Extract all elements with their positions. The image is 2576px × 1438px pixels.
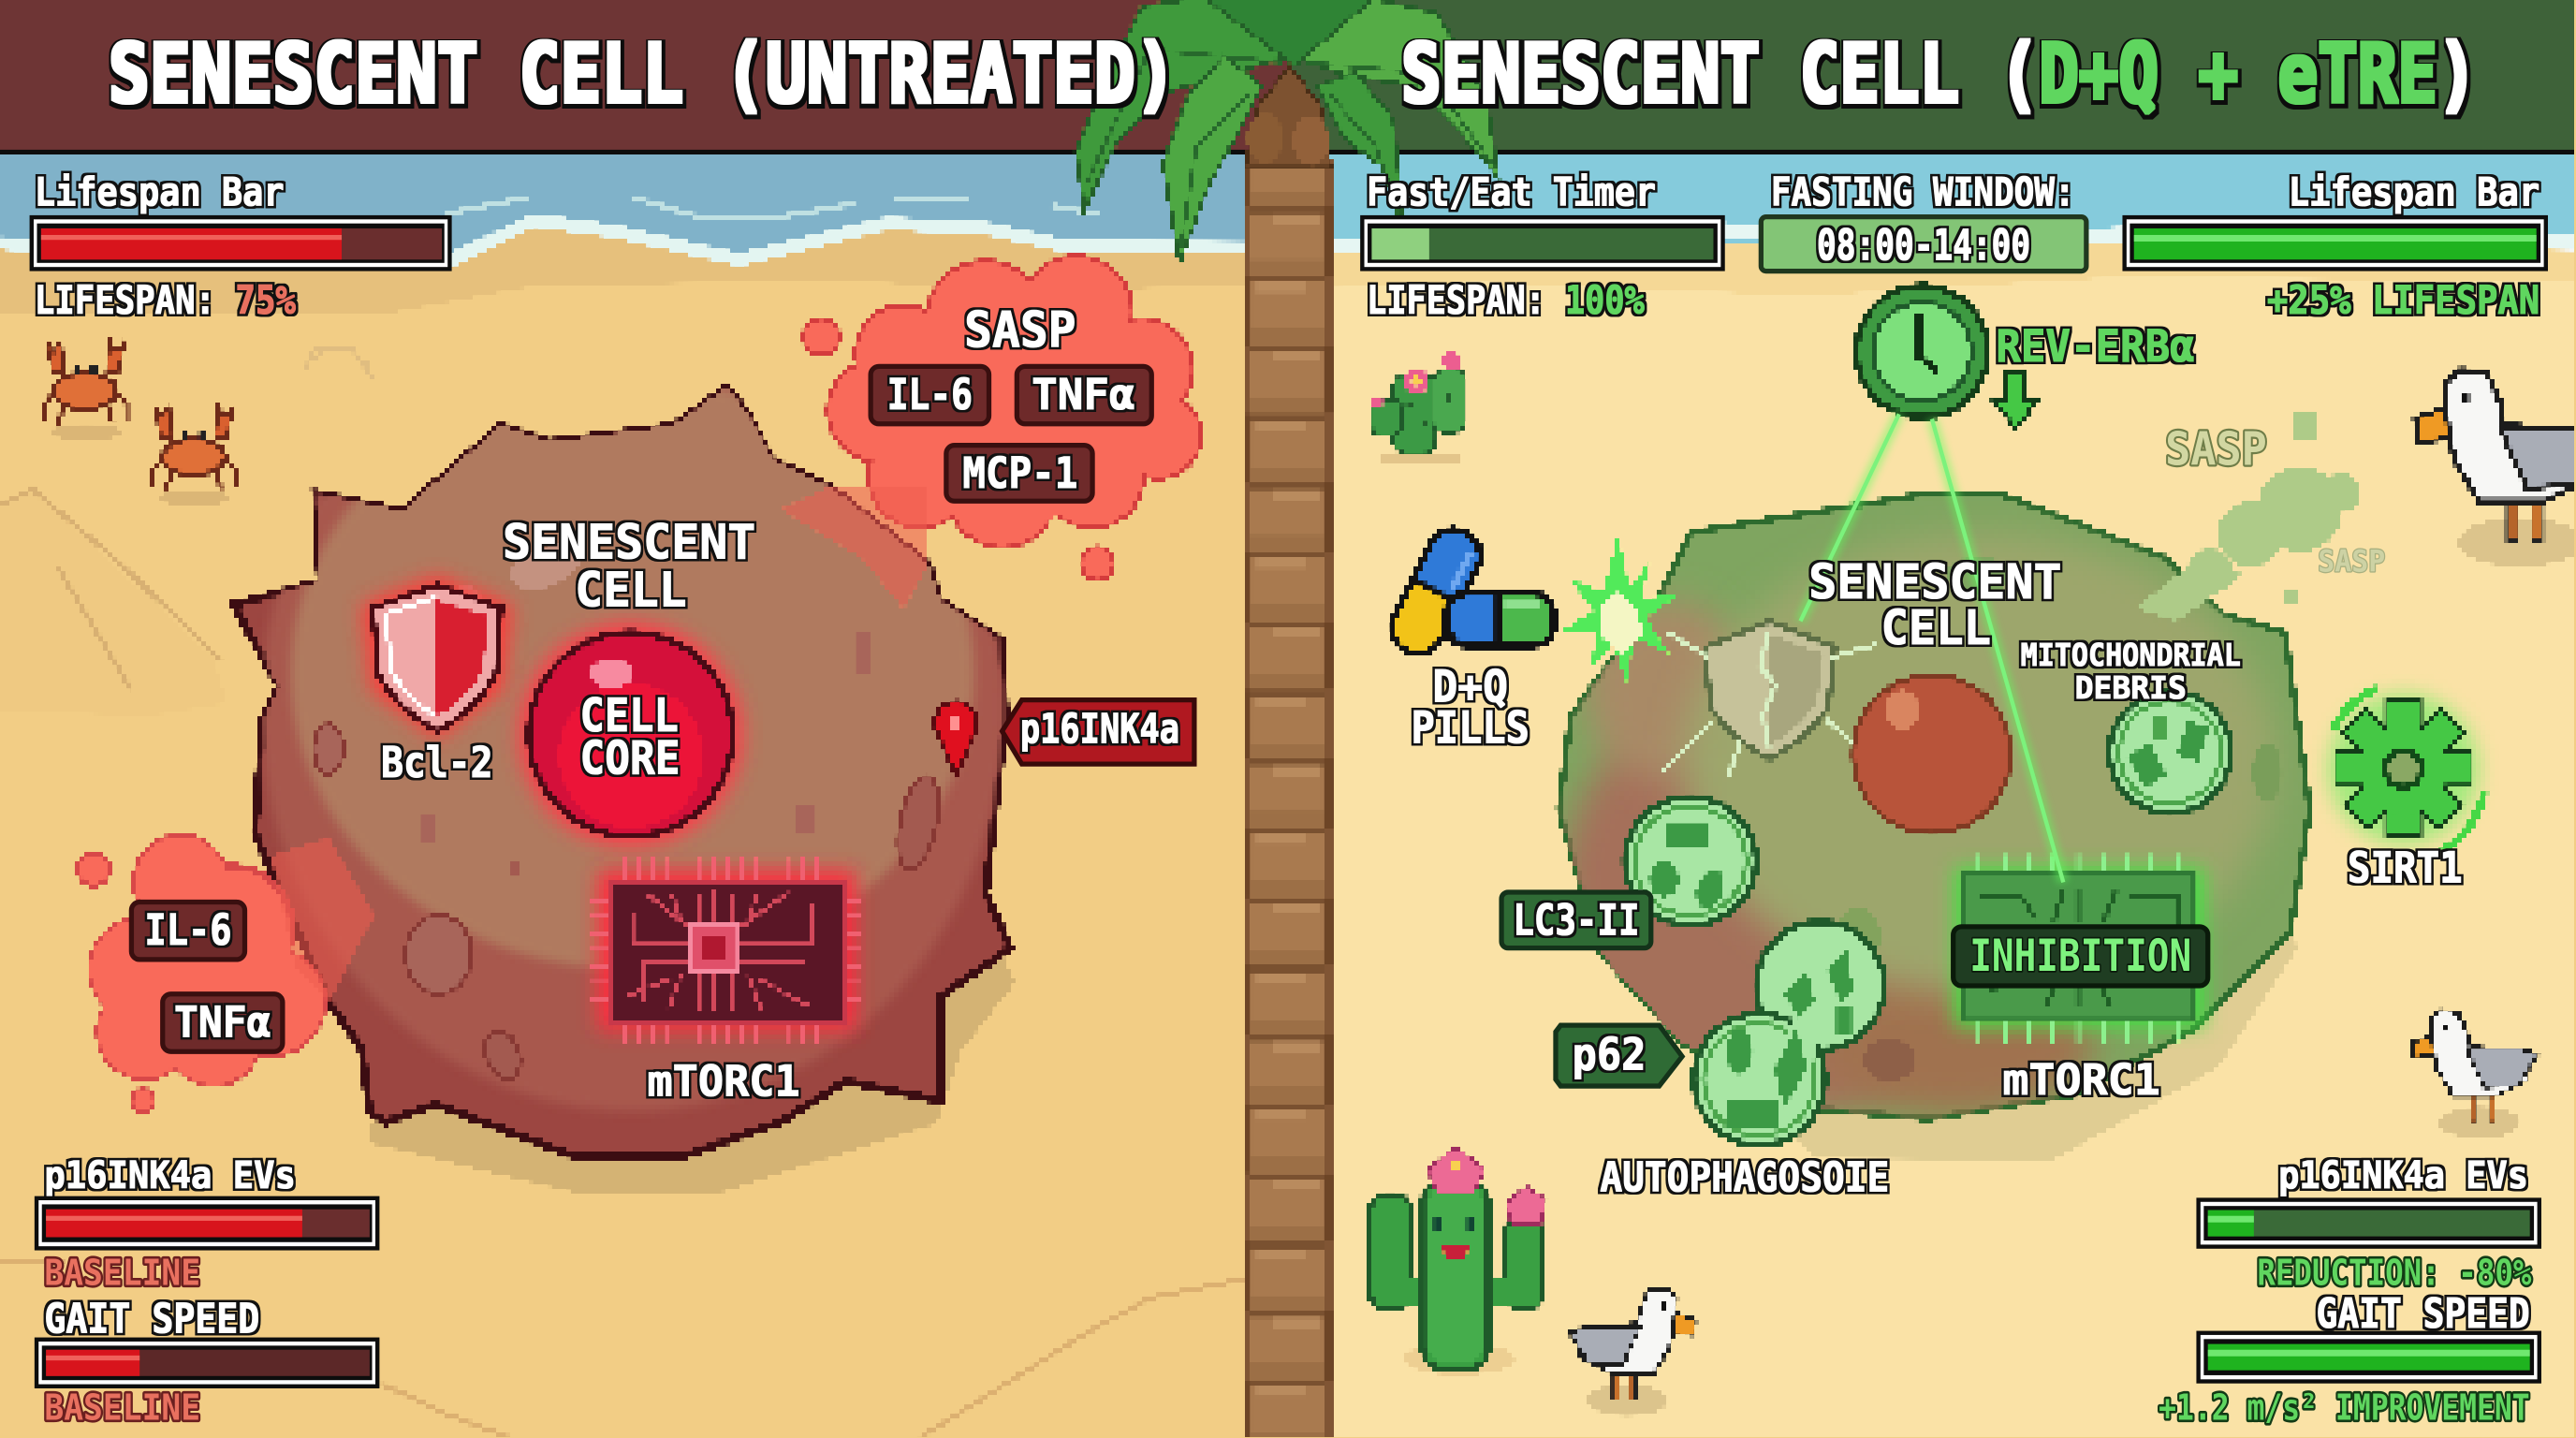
chip: TNFa: TNFα xyxy=(1032,370,1135,419)
label: p16INK4a callout: p16INK4a xyxy=(1020,705,1179,753)
treated cell body xyxy=(1559,494,2310,1160)
fasting window: FASTING WINDOW: xyxy=(1771,169,2075,214)
label: senescent cell, treated: CELL xyxy=(1881,601,1991,656)
label: mitochondrial debris: DEBRIS xyxy=(2075,669,2187,706)
chip: p62 with pointer xyxy=(1556,1025,1682,1086)
right lifespan bar block: +25% LIFESPAN xyxy=(2267,277,2539,323)
title: untreated: SENESCENT CELL (UNTREATED) xyxy=(109,26,1177,122)
label: mTORC1 treated: mTORC1 xyxy=(2002,1055,2160,1105)
left gait speed gauge: GAIT SPEED xyxy=(44,1295,259,1343)
icon: starburst xyxy=(1560,534,1679,682)
left p16INK4a EVs gauge: p16INK4a EVs xyxy=(44,1153,296,1197)
right gait speed gauge xyxy=(2159,1290,2541,1429)
chip: LC3-II: LC3-II xyxy=(1513,896,1639,946)
chip: INHIBITION: INHIBITION xyxy=(1969,931,2191,982)
icon: fusing autophagosomes xyxy=(1693,922,1884,1145)
label: senescent cell, untreated xyxy=(503,516,755,619)
chip: TNFa lower: TNFα xyxy=(174,997,271,1047)
untreated senescent cell body xyxy=(233,309,1016,1193)
left lifespan bar block xyxy=(30,169,452,323)
label: Bcl-2: Bcl-2 xyxy=(381,738,492,787)
header band: untreated xyxy=(0,0,1290,150)
fasting window: 08:00-14:00 xyxy=(1817,220,2030,270)
left gait speed gauge xyxy=(35,1295,379,1429)
icon: crab 2 xyxy=(153,405,235,506)
left p16INK4a EVs gauge xyxy=(35,1153,379,1294)
fasting window xyxy=(1761,169,2086,271)
label: cell core: CELL xyxy=(580,688,679,742)
icon: down arrow xyxy=(1993,373,2039,429)
left p16INK4a EVs gauge: BASELINE xyxy=(44,1252,200,1294)
icon: small cactus xyxy=(1370,352,1465,462)
left lifespan bar block: LIFESPAN: 75% xyxy=(35,277,296,323)
icon: big smiling cactus xyxy=(1370,1147,1545,1375)
SASP cloud xyxy=(781,258,1199,609)
background: left beach xyxy=(0,148,1297,1438)
icon: seagull, middle right xyxy=(2411,1010,2538,1138)
right p16INK4a EVs gauge: p16INK4a EVs xyxy=(2278,1153,2528,1197)
title: treated: SENESCENT CELL (D+Q + eTRE) xyxy=(1401,26,2478,122)
fast/eat timer bar: LIFESPAN: 100% xyxy=(1367,277,1645,323)
label: SIRT1: SIRT1 xyxy=(2348,843,2463,892)
label: p16INK4a callout xyxy=(1003,700,1194,764)
header band: treated xyxy=(1290,0,2576,150)
SASP label: SASP xyxy=(964,301,1076,359)
inhibition light beams from clock xyxy=(1800,414,2063,882)
palm crown xyxy=(1076,0,1499,263)
chip: MCP-1: MCP-1 xyxy=(962,448,1077,498)
label: D+Q pills xyxy=(1412,661,1530,754)
label: mTORC1 untreated: mTORC1 xyxy=(647,1057,800,1107)
label: senescent cell, untreated: CELL xyxy=(575,564,687,619)
right gait speed gauge: GAIT SPEED xyxy=(2317,1290,2530,1338)
chip: IL-6 lower: IL-6 xyxy=(144,905,231,955)
icon: seagull, bottom centre xyxy=(1570,1288,1695,1416)
label: mitochondrial debris xyxy=(2021,637,2241,706)
icon: D+Q pills xyxy=(1383,521,1554,662)
label: cell core xyxy=(580,688,681,785)
icon: cracked Bcl-2 shield xyxy=(1662,621,1878,775)
fast/eat timer bar: Fast/Eat Timer xyxy=(1367,169,1656,214)
label: mitochondrial debris: MITOCHONDRIAL xyxy=(2021,637,2241,673)
palm trunk xyxy=(1244,157,1332,1438)
icon: cell core xyxy=(520,623,742,846)
lower-left cytokine cloud xyxy=(77,836,374,1112)
right p16INK4a EVs gauge: REDUCTION: -80% xyxy=(2257,1252,2531,1294)
fast/eat timer bar xyxy=(1360,169,1725,323)
icon: crab 1 xyxy=(44,340,126,440)
icon: mTORC1 chip, active xyxy=(592,858,862,1045)
faint small SASP label: SASP xyxy=(2318,546,2385,580)
right lifespan bar block: Lifespan Bar xyxy=(2289,169,2539,214)
icon: LC3-II autophagosome xyxy=(1625,797,1756,925)
chip: p62 with pointer: p62 xyxy=(1573,1030,1647,1081)
label: REV-ERB alpha: REV-ERBα xyxy=(1996,321,2195,373)
faint released SASP xyxy=(2136,411,2361,621)
right p16INK4a EVs gauge xyxy=(2196,1153,2541,1294)
icon: mTORC1 chip, inhibited xyxy=(1954,855,2204,1045)
right lifespan bar block xyxy=(2122,169,2548,323)
background: right beach xyxy=(1297,148,2576,1438)
icon: Bcl-2 shield xyxy=(361,575,513,740)
icon: p16INK4a pin xyxy=(935,701,977,775)
label: senescent cell, treated xyxy=(1808,555,2062,656)
left gait speed gauge: BASELINE xyxy=(44,1387,200,1429)
icon: mitochondrial debris vesicle xyxy=(2109,692,2231,814)
left lifespan bar block: Lifespan Bar xyxy=(35,169,285,214)
label: autophagosome: AUTOPHAGOSOIE xyxy=(1600,1153,1889,1201)
label: senescent cell, untreated: SENESCENT xyxy=(503,516,755,571)
label: cell core: CORE xyxy=(580,731,681,785)
label: D+Q pills: PILLS xyxy=(1412,702,1530,754)
chip: TNFa xyxy=(1017,366,1151,424)
icon: shrunken nucleus xyxy=(1853,675,2011,833)
label: D+Q pills: D+Q xyxy=(1432,661,1508,712)
label: senescent cell, treated: SENESCENT xyxy=(1808,555,2062,610)
icon: seagull, top right xyxy=(2415,370,2576,566)
chip: IL-6: IL-6 xyxy=(887,370,973,419)
icon: SIRT1 gear xyxy=(2328,688,2484,851)
icon: circadian clock xyxy=(1856,283,1988,419)
faint SASP label: SASP xyxy=(2165,422,2267,477)
